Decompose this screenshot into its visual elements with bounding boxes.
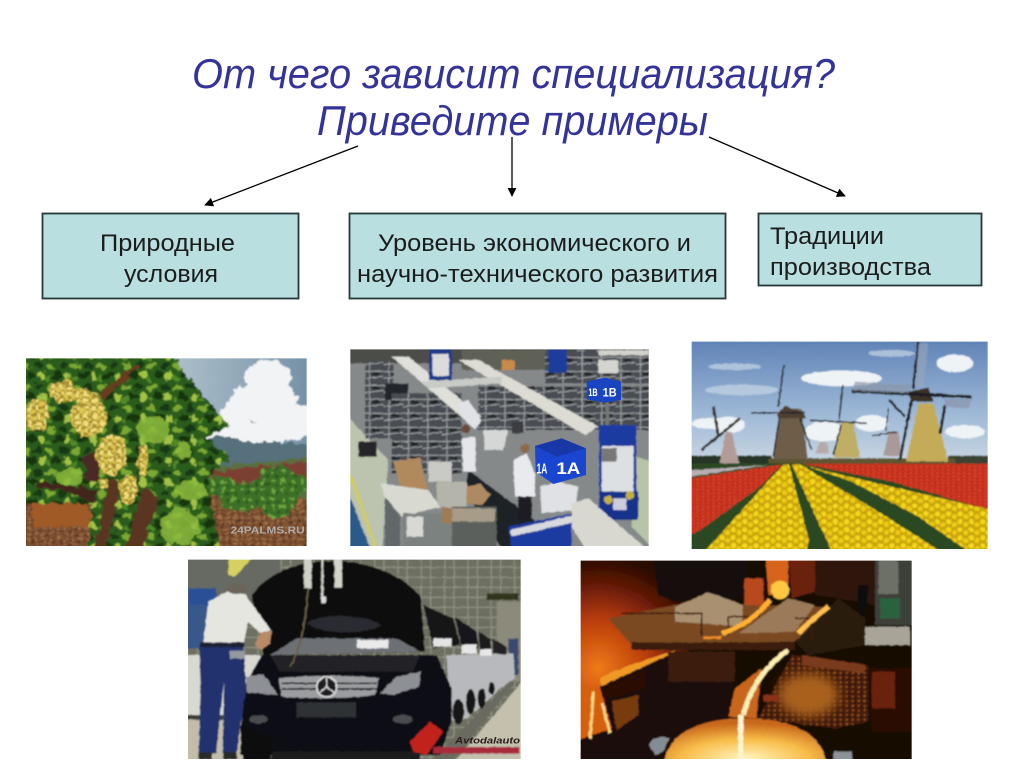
sign: 1B: 1B — [603, 386, 617, 400]
photo: factory floor — [350, 349, 649, 546]
arrow: to development level — [511, 137, 513, 196]
box: natural conditions: Природные — [100, 230, 235, 257]
photo: car assembly line — [188, 560, 521, 759]
box: natural conditions — [42, 214, 298, 298]
sign: 1B — [587, 378, 621, 403]
arrow: to natural conditions — [205, 146, 358, 205]
box: development level: Уровень экономического и — [378, 230, 691, 257]
arrow: to production traditions — [709, 137, 845, 196]
sign: 1A: 1A — [537, 461, 548, 477]
photo: car assembly line: Avtodalauto — [454, 736, 520, 746]
sign: 1B: 1B — [588, 387, 598, 399]
photo: vineyard: 24PALMS.RU — [231, 525, 305, 536]
box: development level: научно-технического развития — [357, 261, 718, 288]
box: production traditions: производства — [770, 254, 931, 281]
box: natural conditions: условия — [124, 261, 218, 288]
box: production traditions: Традиции — [770, 223, 884, 250]
title: От чего зависит специализация? — [192, 50, 836, 97]
photo: windmills and tulips — [692, 342, 988, 549]
sign: 1A — [535, 438, 586, 484]
title — [192, 50, 836, 144]
photo: vineyard — [26, 358, 307, 546]
sign: 1A: 1A — [556, 459, 580, 478]
box: production traditions — [758, 214, 982, 286]
box: development level — [350, 214, 726, 298]
photo: molten metal pour — [580, 560, 912, 759]
title: Приведите примеры — [317, 97, 708, 144]
